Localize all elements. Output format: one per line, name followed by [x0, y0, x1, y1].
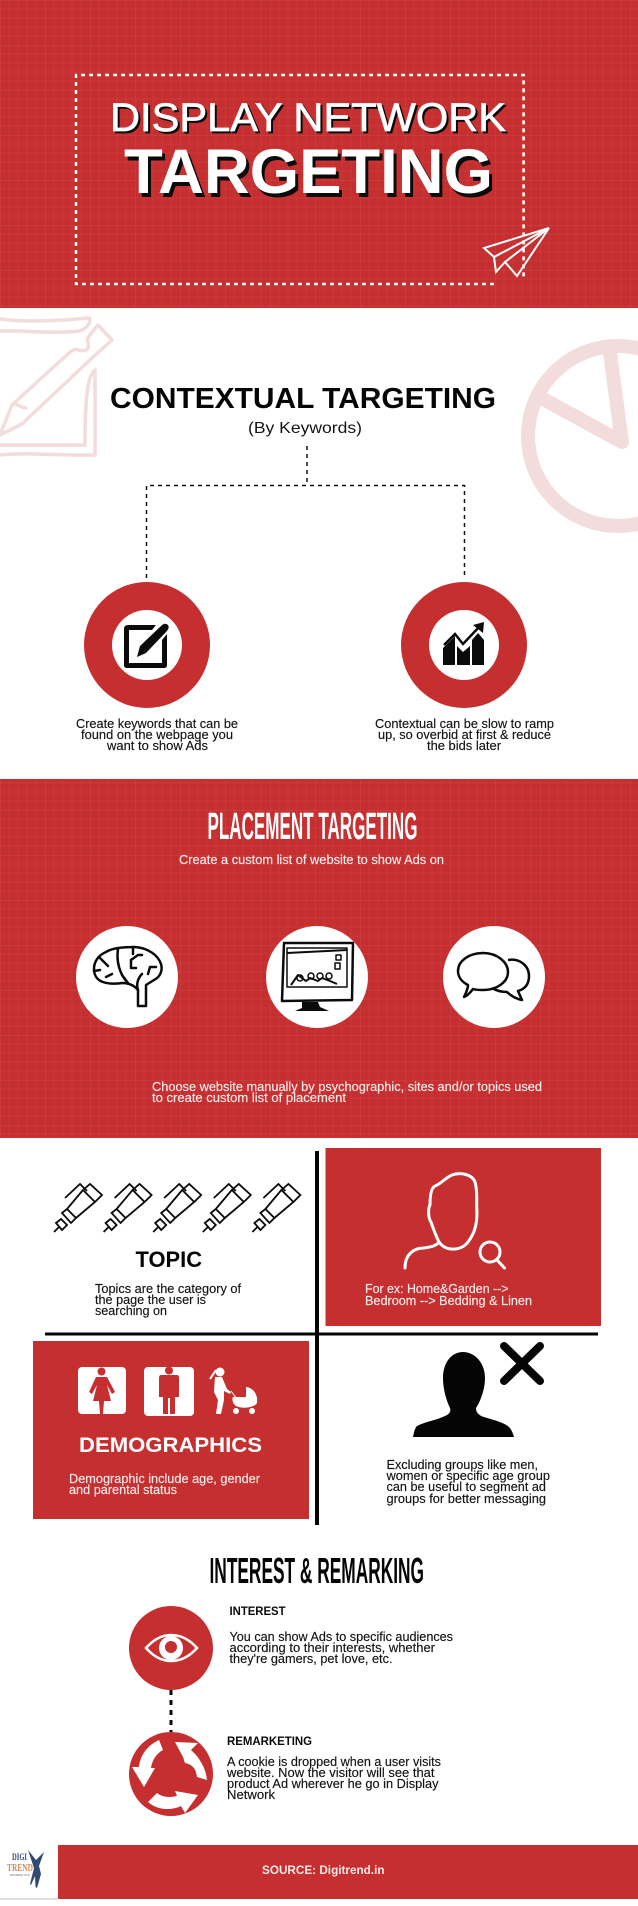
text: interest: INTEREST: [230, 1604, 286, 1618]
text: placement note: Choose website manually by psychographic, sites and/or topics used: [152, 1080, 542, 1094]
logo: digitrend: EMPOWERING YOUTH: [10, 1873, 30, 1877]
heading: demographics: DEMOGRAPHICS: [79, 1434, 262, 1457]
title: [110, 96, 508, 211]
icon: remarketing cycle: [129, 1732, 213, 1816]
text: exclusions note: [385, 1458, 550, 1506]
text: placement intro: Create a custom list of website to show Ads on: [179, 853, 444, 867]
text: remarketing: [226, 1734, 441, 1802]
icon: silhouette: [413, 1352, 514, 1437]
text: source: SOURCE: Digitrend.in: [262, 1863, 384, 1877]
title: TARGETING: [127, 141, 496, 211]
text: topic example: For ex: Home&Garden -->: [365, 1282, 508, 1296]
circle: keyword edit: [84, 582, 210, 708]
subheading: by keywords: (By Keywords): [248, 420, 362, 437]
text: ramp note: the bids later: [427, 739, 501, 753]
block: topic: [54, 1184, 300, 1318]
title: DISPLAY NETWORK: [112, 98, 508, 142]
connector: dashed tree: [146, 446, 464, 578]
text: exclusions note: groups for better messaging: [386, 1492, 546, 1506]
text: placement note: to create custom list of placement: [152, 1091, 347, 1105]
logo: digitrend: [7, 1850, 44, 1888]
text: topic note: the page the user is: [95, 1293, 206, 1307]
footer bar: [0, 1845, 638, 1900]
text: demographics note: Demographic include age, gender: [69, 1472, 260, 1486]
connector: dashed link: [170, 1690, 172, 1732]
panel: topic example: [326, 1148, 601, 1326]
logo: digitrend: DIGI: [12, 1852, 27, 1862]
logo: digitrend: TREND: [7, 1863, 33, 1874]
icon: woman: [78, 1367, 126, 1414]
text: remarketing: product Ad wherever he go in Display: [227, 1777, 439, 1791]
text: keyword note: want to show Ads: [106, 739, 208, 753]
decoration: notepad and pen: [0, 318, 112, 455]
decoration: pie chart: [528, 346, 638, 526]
text: keyword note: found on the webpage you: [81, 728, 233, 742]
text: remarketing: REMARKETING: [227, 1734, 312, 1748]
divider: vertical bar: [315, 1151, 319, 1525]
text: interest: [230, 1604, 453, 1666]
dashed title frame: [76, 75, 524, 284]
icons: five pens: [54, 1184, 300, 1232]
icon: cross: [504, 1346, 540, 1381]
icon: parent with stroller: [210, 1368, 257, 1414]
text: exclusions note: can be useful to segment ad: [386, 1480, 546, 1494]
icon: edit note: [124, 624, 169, 668]
text: interest: they're gamers, pet love, etc.: [230, 1652, 392, 1666]
text: topic note: searching on: [95, 1304, 167, 1318]
text: topic example: Bedroom --> Bedding & Linen: [365, 1294, 532, 1308]
text: ramp note: [375, 717, 554, 753]
block: exclusions: [385, 1346, 550, 1506]
title: TARGETING: [124, 137, 493, 207]
icon: man: [144, 1366, 194, 1416]
text: interest: according to their interests, whether: [230, 1641, 435, 1655]
text: placement note: [152, 1080, 542, 1105]
text: exclusions note: Excluding groups like men,: [386, 1458, 538, 1472]
title: DISPLAY NETWORK: [110, 96, 506, 140]
text: remarketing: website. Now the visitor will see that: [226, 1766, 435, 1780]
heading: topic: TOPIC: [136, 1247, 202, 1272]
text: ramp note: up, so overbid at first & reduce: [378, 728, 551, 742]
text: topic note: Topics are the category of: [95, 1282, 242, 1296]
divider: horizontal bar: [45, 1332, 598, 1336]
icon: interest eye: [129, 1606, 213, 1690]
circle: growth chart: [401, 582, 527, 708]
icon: rising bars: [443, 622, 484, 665]
heading: contextual targeting: CONTEXTUAL TARGETING: [110, 383, 496, 415]
text: topic example: [365, 1282, 532, 1308]
text: interest: You can show Ads to specific audiences: [230, 1630, 453, 1644]
text: remarketing: A cookie is dropped when a user visits: [227, 1755, 441, 1769]
text: demographics note: [69, 1472, 260, 1497]
circle: speech bubbles: [443, 926, 545, 1028]
text: keyword note: [76, 717, 238, 753]
text: keyword note: Create keywords that can be: [76, 717, 238, 731]
text: exclusions note: women or specific age group: [385, 1469, 550, 1483]
text: ramp note: Contextual can be slow to ramp: [375, 717, 554, 731]
panel: demographics: [33, 1341, 309, 1519]
icon: paper plane: [484, 228, 549, 276]
panel: header: [0, 0, 638, 308]
text: topic note: [95, 1282, 242, 1318]
text: remarketing: Network: [227, 1788, 276, 1802]
text: demographics note: and parental status: [69, 1483, 177, 1497]
icon: person search: [405, 1174, 504, 1268]
circle: brain: [76, 926, 178, 1028]
circle: monitor: [266, 926, 368, 1028]
panel: placement targeting: [0, 779, 638, 1138]
